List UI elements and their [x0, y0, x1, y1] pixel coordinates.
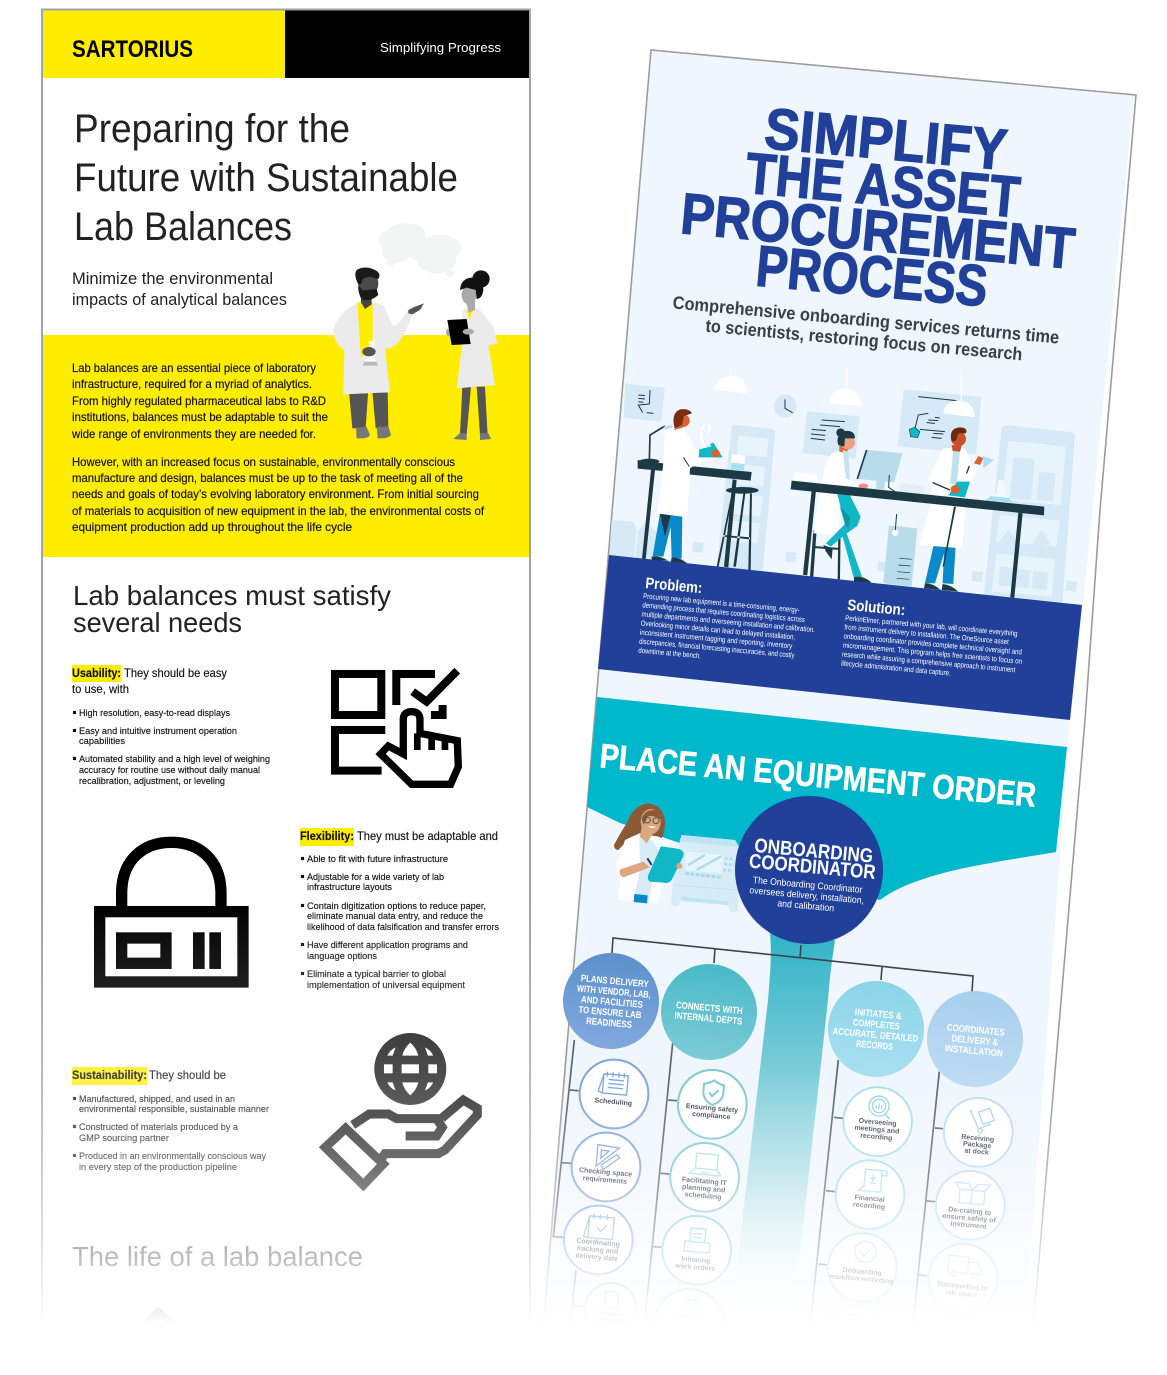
scientist one at bench: [639, 409, 745, 563]
task: financial recording: [833, 1157, 907, 1232]
wall chart details: [638, 390, 957, 440]
panel background: [543, 50, 1134, 1330]
problem text: Procuring new lab equipment is a time-consuming, energy-: [643, 591, 800, 615]
problem text: Problem:: [645, 575, 703, 597]
text block: flexibility: implementation of universal equipment: [307, 980, 465, 991]
task: receiving package at dock: Receiving: [961, 1134, 994, 1144]
task: financial recording: Financial: [854, 1194, 885, 1204]
task: cropped last circle: [918, 1313, 992, 1375]
paragraph 1: institutions, balances must be adaptable to suit the: [72, 410, 328, 424]
text block: flexibility: Adjustable for a wide variety of lab: [307, 872, 444, 883]
text block: intro paragraphs: [71, 361, 485, 534]
circle: onboarding coordinator: The Onboarding Coordinator: [752, 875, 863, 896]
text block: flexibility: infrastructure layouts: [307, 882, 392, 893]
problem text: demanding process that requires coordinating logistics across: [642, 600, 805, 624]
title: PROCUREMENT: [678, 181, 1077, 282]
subtitle: Minimize the environmental: [72, 269, 273, 288]
problem text: Overlooking minor details can lead to delayed installation,: [640, 618, 796, 641]
task: checking space requirements: requirements: [582, 1175, 627, 1186]
icon: globe in hand: [325, 1033, 477, 1185]
solution text: Solution:: [847, 597, 906, 619]
subtitle: to scientists, restoring focus on research: [705, 316, 1023, 364]
title: PROCESS: [753, 234, 990, 319]
instrument: [671, 835, 739, 913]
illustration: technician with instrument: [614, 803, 739, 913]
problem text: discrepancies, financial forecasting inaccuracies, and costly: [639, 637, 795, 660]
title: Lab Balances: [74, 205, 292, 249]
circle: plans delivery: AND FACILITIES: [580, 994, 643, 1011]
problem text: [638, 575, 818, 670]
panel: problem and solution band: [598, 555, 1082, 720]
title: THE ASSET: [743, 141, 1023, 230]
task: facilitating IT planning and scheduling: scheduling: [684, 1191, 722, 1202]
subtitle: [72, 269, 287, 309]
task: transporting to lab space: [926, 1241, 1000, 1316]
task: initiating work orders: work orders: [674, 1262, 715, 1273]
paragraph 1: From highly regulated pharmaceutical labs to R&D: [72, 394, 326, 408]
subtitle: impacts of analytical balances: [72, 290, 287, 309]
task circles grid: [561, 1057, 1015, 1375]
solution text: [841, 597, 1026, 684]
title: [74, 107, 458, 249]
circle: connects with internal departments: INTERNAL DEPTS: [674, 1010, 743, 1028]
bench two: [791, 481, 1044, 598]
text block: flexibility: Able to fit with future infrastructure: [307, 854, 448, 865]
title: Preparing for the: [74, 107, 350, 151]
paragraph 1: wide range of environments they are needed for.: [71, 427, 316, 441]
title: [678, 96, 1077, 319]
text block: sustainability: [72, 1067, 269, 1173]
task: coordinating tracking and delivery date: [561, 1203, 636, 1277]
circle: plans delivery: READINESS: [586, 1016, 632, 1031]
task: initiating work orders: Initiating: [681, 1256, 711, 1265]
text block: flexibility: Contain digitization options to reduce paper,: [307, 901, 486, 912]
circle: connects with internal departments: [657, 960, 761, 1064]
circle: initiates and completes records: RECORDS: [856, 1039, 893, 1053]
lab background furniture: [609, 385, 1077, 600]
circle: plans delivery: [559, 949, 663, 1053]
problem text: downtime at the bench.: [638, 646, 701, 660]
task: onboarding workflow recording: Onboarding: [842, 1267, 882, 1277]
icon: balance: [100, 842, 243, 982]
paragraph 2: of materials to acquisition of new equipment in the lab, the environmental costs of: [72, 504, 485, 518]
text block: usability: High resolution, easy-to-read displays: [79, 708, 230, 719]
task: scheduling: Scheduling: [594, 1097, 632, 1108]
circle: coordinates delivery and installation: DELIVERY &: [951, 1033, 999, 1049]
scientist two at computer: [793, 428, 872, 583]
paragraph 2: equipment production add up throughout the life cycle: [72, 520, 352, 534]
panel frame: [543, 50, 1136, 1330]
circle: onboarding coordinator: [729, 790, 889, 950]
task: ensuring safety compliance: compliance: [692, 1111, 731, 1121]
task: facilitating IT planning and scheduling: Facilitating IT: [682, 1176, 728, 1187]
icon: cropped lifecycle marker: [143, 1312, 175, 1326]
circle: plans delivery: PLANS DELIVERY: [580, 973, 650, 990]
bench one and stool: [638, 460, 759, 570]
icon: touch screen hand: [335, 671, 458, 784]
heading: lab balances must satisfy several needs: [73, 580, 391, 638]
task: initiating work orders: [659, 1213, 734, 1288]
text block: usability: Usability:: [72, 666, 121, 680]
solution text: from instrument delivery to installation. The OneSource asset: [844, 622, 1010, 646]
task: facilitating IT planning and scheduling: [667, 1140, 742, 1215]
figure: male scientist: [333, 267, 424, 438]
text block: sustainability: Sustainability:: [72, 1068, 147, 1082]
task: checking space requirements: Checking space: [579, 1167, 632, 1179]
problem text: multiple departments and overseeing installation and calibration.: [641, 609, 815, 634]
text block: flexibility: Eliminate a typical barrier to global: [307, 969, 446, 980]
panel: yellow intro band: [43, 335, 529, 557]
task: overseeing meetings and recording: Overseeing: [858, 1118, 897, 1128]
title: SIMPLIFY: [762, 96, 1010, 183]
text block: sustainability: Produced in an environmentally conscious way: [79, 1151, 266, 1162]
solution text: PerkinElmer, partnered with your lab, will coordinate everything: [845, 613, 1018, 638]
paragraph 1: Lab balances are an essential piece of laboratory: [72, 361, 316, 375]
task: transporting to lab space: Transporting to: [936, 1281, 988, 1292]
circle: plans delivery: TO ENSURE LAB: [578, 1005, 642, 1021]
panel frame: [42, 10, 530, 1330]
header: logo bar: [43, 10, 529, 78]
task: de-crating: De-crating to: [948, 1206, 991, 1217]
icon: thought cloud: [379, 223, 462, 277]
task: checking space requirements: [569, 1130, 643, 1204]
task: document cropped: [818, 1303, 892, 1375]
paragraph 1: [71, 361, 328, 441]
text block: sustainability: in every step of the production pipeline: [79, 1162, 237, 1173]
circle: plans delivery: WITH VENDOR, LAB,: [576, 983, 651, 1001]
logo: Sartorius wordmark: SARTORIUS: [72, 36, 193, 63]
computer monitor: [857, 450, 924, 530]
task: receiving package at dock: [941, 1095, 1015, 1170]
paragraph 2: However, with an increased focus on sustainable, environmentally conscious: [72, 455, 455, 469]
task: de-crating: instrument: [950, 1221, 987, 1231]
circle: connects with internal departments: CONNECTS WITH: [675, 1000, 743, 1017]
text block: flexibility: Flexibility:: [300, 829, 354, 843]
illustration: two scientists and thought cloud: [333, 223, 497, 440]
task: ensuring safety compliance: [675, 1067, 750, 1142]
task: overseeing meetings and recording: recording: [860, 1133, 893, 1142]
panel: place an equipment order band: [587, 697, 1067, 900]
text block: flexibility: likelihood of data falsification and transfer errors: [307, 922, 499, 933]
heading: lab balances must satisfy several needs: Lab balances must satisfy: [73, 580, 391, 611]
circle: coordinates delivery and installation: [923, 987, 1027, 1091]
panel: asset procurement infographic: [543, 50, 1136, 1375]
circle: initiates and completes records: ACCURATE, DETAILED: [832, 1026, 919, 1045]
text block: sustainability: They should be: [149, 1068, 226, 1082]
circle: coordinates delivery and installation: COORDINATES: [946, 1022, 1005, 1039]
task: coordinating tracking and delivery date: delivery date: [575, 1252, 618, 1263]
paragraph 2: needs and goals of today’s evolving laboratory environment. From initial sourcing: [72, 487, 479, 501]
heading: lab balances must satisfy several needs: several needs: [73, 607, 242, 638]
paragraph 2: manufacture and design, balances must be up to the task of meeting all of the: [72, 471, 463, 485]
problem text: inconsistent instrument tagging and reporting, inventory: [640, 628, 793, 650]
title: Future with Sustainable: [74, 156, 458, 200]
task: ensuring safety compliance: Ensuring safety: [686, 1103, 738, 1115]
task: coordinating tracking and delivery date: tracking and: [576, 1245, 618, 1256]
task: onboarding workflow recording: [825, 1230, 899, 1305]
text block: usability: recalibration, adjustment, or leveling: [79, 776, 225, 787]
text block: flexibility: [300, 828, 499, 991]
circle: onboarding coordinator: COORDINATOR: [748, 851, 877, 884]
task: receiving package at dock: at dock: [964, 1148, 989, 1157]
circle: onboarding coordinator: oversees delivery, installation,: [749, 885, 864, 907]
task: financial recording: recording: [853, 1202, 885, 1211]
text block: flexibility: eliminate manual data entry, and reduce the: [307, 911, 483, 922]
text block: usability: [72, 665, 270, 787]
heading: place an equipment order: PLACE AN EQUIPMENT ORDER: [598, 737, 1038, 815]
circle: coordinates delivery and installation: INSTALLATION: [944, 1043, 1003, 1060]
text block: sustainability: GMP sourcing partner: [79, 1133, 169, 1144]
text block: flexibility: language options: [307, 951, 377, 962]
text block: flexibility: They must be adaptable and: [357, 829, 498, 843]
circle: onboarding coordinator: ONBOARDING: [753, 835, 874, 868]
bottom fade overlays: [0, 900, 1167, 1375]
subtitle: Comprehensive onboarding services returns time: [672, 292, 1060, 348]
text block: sustainability: Constructed of materials produced by a: [79, 1122, 239, 1133]
task: facilitating IT planning and scheduling: planning and: [682, 1184, 726, 1194]
circle: initiates and completes records: INITIATES &: [854, 1007, 902, 1022]
text block: sustainability: environmental responsible, sustainable manner: [79, 1104, 269, 1115]
heading: the life of a lab balance: The life of a lab balance: [72, 1241, 363, 1272]
tagline: Simplifying Progress: [380, 40, 501, 55]
task: providing notification: notification: [594, 1316, 626, 1325]
server tower: [883, 525, 917, 587]
panel: Sartorius lab balances infographic: [42, 10, 530, 1330]
paragraph 2: [72, 455, 485, 534]
text block: usability: accuracy for routine use without daily manual: [79, 765, 260, 776]
illustration: laboratory scene: [609, 370, 1077, 600]
figure: female scientist with tablet: [446, 270, 497, 440]
ceiling lamps: [715, 370, 975, 417]
text block: usability: They should be easy: [124, 666, 227, 680]
solution text: onboarding coordinator provides complete technical oversight and: [843, 631, 1022, 657]
task: providing notification: Providing: [597, 1310, 624, 1319]
text block: usability: to use, with: [72, 682, 129, 696]
org chart lines: [612, 938, 973, 992]
task: org structure cropped: [652, 1286, 727, 1360]
task: providing notification: [584, 1281, 638, 1336]
solution text: research while assuring a comprehensive approach to instrument: [842, 650, 1016, 674]
task: receiving package at dock: Package: [963, 1141, 992, 1150]
task: coordinating tracking and delivery date: Coordinating: [576, 1238, 620, 1249]
circle: onboarding coordinator: and calibration: [777, 898, 835, 914]
scientist three with clipboard: [919, 427, 1013, 592]
trunk connector: [730, 932, 835, 1326]
text block: usability: Easy and intuitive instrument operation: [79, 726, 237, 737]
text block: flexibility: Have different application programs and: [307, 940, 468, 951]
task: de-crating: [933, 1168, 1007, 1243]
text block: sustainability: Manufactured, shipped, and used in an: [79, 1094, 235, 1105]
task: onboarding workflow recording: workflow recording: [828, 1273, 894, 1286]
text block: usability: Automated stability and a high level of weighing: [79, 754, 270, 765]
circle: initiates and completes records: [824, 977, 928, 1081]
text block: usability: capabilities: [79, 736, 125, 747]
task: overseeing meetings and recording: [840, 1084, 915, 1159]
task: transporting to lab space: lab space: [945, 1289, 978, 1299]
task: overseeing meetings and recording: meetings and: [854, 1125, 900, 1136]
technician: [614, 803, 684, 903]
column lines and ticks: [553, 1040, 943, 1327]
circle: initiates and completes records: COMPLETES: [852, 1017, 900, 1033]
task: de-crating: ensure safety of: [942, 1213, 997, 1225]
paragraph 1: infrastructure, required for a myriad of analytics.: [72, 377, 312, 391]
task: scheduling: [577, 1057, 651, 1131]
solution text: lifecycle administration and data capture.: [841, 659, 951, 678]
solution text: micromanagement. This program helps free scientists to focus on: [842, 640, 1022, 666]
